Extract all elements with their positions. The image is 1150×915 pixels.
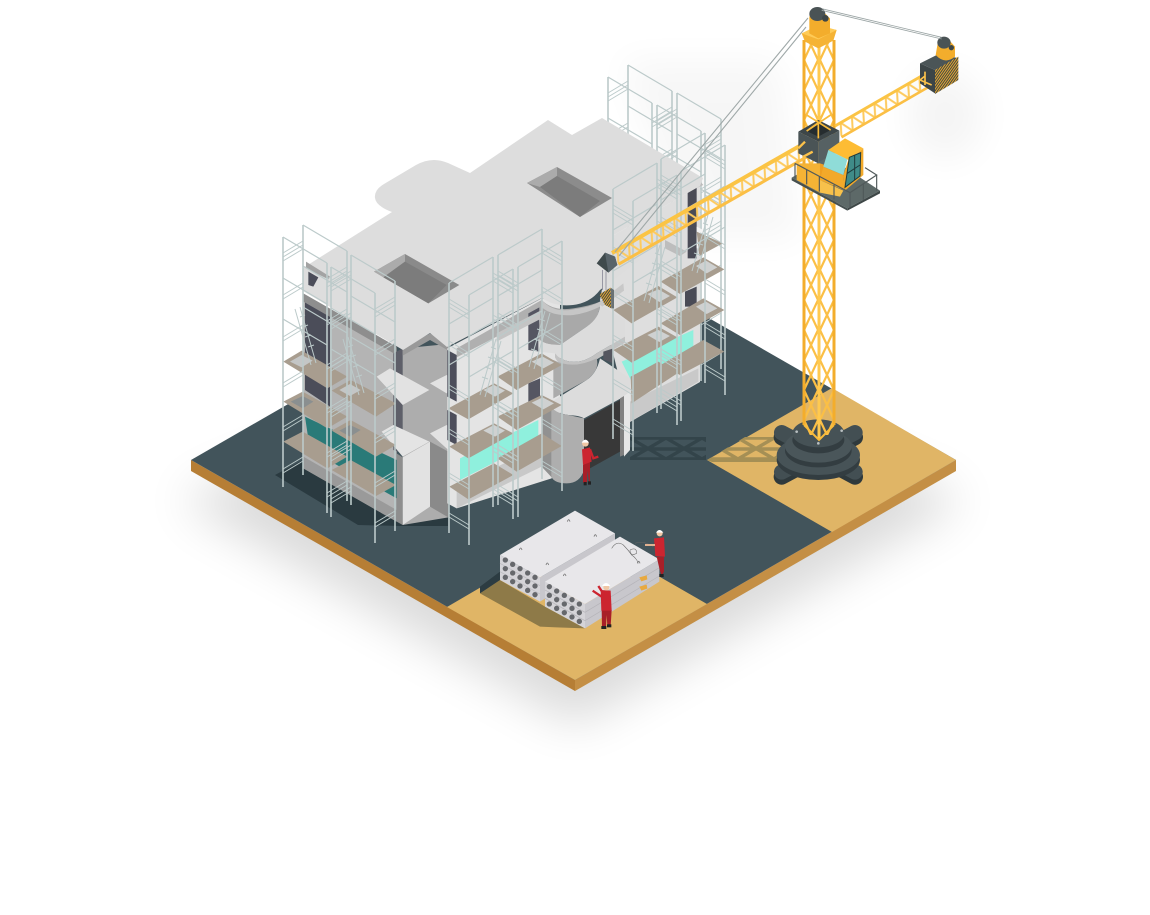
soft ground shadow [180,60,983,725]
building walls: rear wing [600,179,703,422]
worker in front of slabs [593,583,612,629]
roof opening: left [374,254,459,303]
ground shadows [275,437,790,526]
roof notch on left corner [306,262,330,287]
recess under middle slab [553,358,597,398]
rounded corner wall [542,410,552,477]
dark stub column [603,348,613,363]
aqua window [460,420,538,480]
crane front jib [612,143,811,264]
building walls: right wing [447,283,630,508]
roof slab [303,118,703,350]
recess under roof lobe [538,300,600,345]
plinth [457,445,542,508]
crane head, cab and counterweight [792,7,958,211]
building walls: left and centre [303,293,456,525]
counterweight [920,53,958,94]
crane base [777,419,860,480]
cab deck [792,157,880,211]
shadow of slab stacks [480,572,585,628]
trolley and hook [597,253,617,308]
cab railing [795,163,877,207]
mid wall band [497,310,542,342]
crane rear jib [835,72,935,137]
tan zone: front [447,576,707,680]
rear wing detail [665,179,703,307]
tan zone: crane pad [707,388,956,532]
mast collar [798,115,839,163]
scaffold: front towers [283,133,725,545]
worker on right of slabs [645,530,665,577]
counterweight pulley [936,37,955,60]
mast cap [802,7,837,48]
left columns [447,350,457,402]
middle slab [538,305,625,362]
jib root braces [798,142,813,157]
roof opening: right [527,167,612,217]
worker at door [582,440,598,485]
tongue [600,283,624,308]
concrete slab stacks [500,511,659,628]
lower slab [552,358,630,418]
top cable [822,9,942,39]
wall band under roof [457,300,542,357]
scaffold: rear towers [608,65,721,381]
mid column [528,307,539,352]
ground platform [191,240,956,691]
rear slab stack [500,511,615,602]
cab [797,138,863,197]
garage door [584,400,620,472]
scaffold decks [283,232,724,499]
front slab stack [545,537,659,628]
crane mast [803,40,835,440]
hoist cables [615,18,808,256]
